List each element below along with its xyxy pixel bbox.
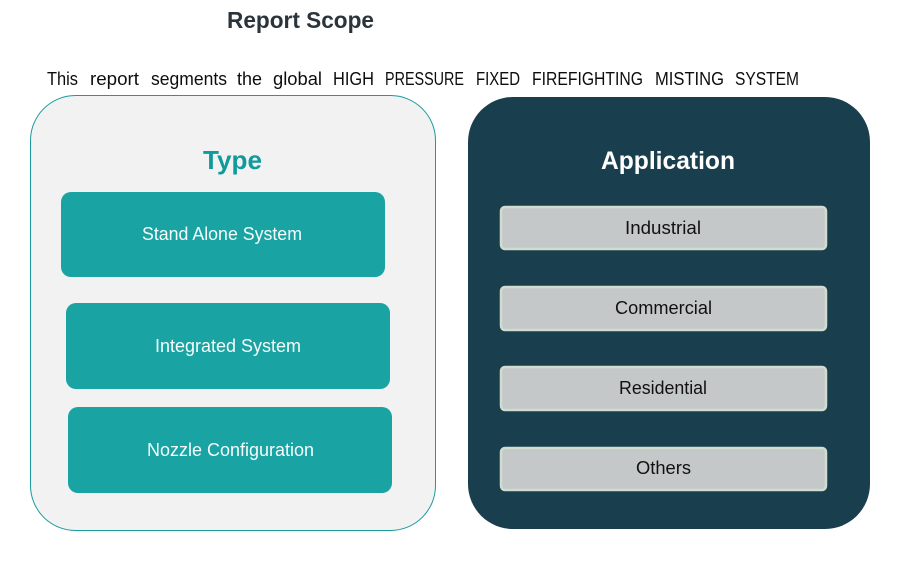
panel: type [30, 96, 436, 530]
panel: application [468, 97, 870, 529]
type heading: Type [203, 145, 262, 175]
type item: stand alone system [61, 192, 385, 277]
type item: integrated system: Integrated System [155, 336, 301, 356]
title: Report Scope [227, 7, 374, 33]
application item: others: Others [636, 458, 691, 478]
intro text: FIREFIGHTING [532, 69, 643, 89]
intro text: report [90, 69, 139, 89]
application item: residential: Residential [619, 378, 707, 398]
intro text: SYSTEM [735, 69, 799, 89]
intro text: the [237, 69, 262, 89]
application item: industrial: Industrial [625, 218, 701, 238]
intro text: global [273, 69, 322, 89]
application heading: Application [601, 147, 735, 175]
type item: stand alone system: Stand Alone System [142, 224, 302, 244]
type item: integrated system [66, 303, 390, 389]
intro text: PRESSURE [385, 69, 464, 89]
intro text: FIXED [476, 69, 520, 89]
application item: residential [501, 367, 826, 410]
type item: nozzle configuration [68, 407, 392, 493]
application item: industrial [501, 207, 826, 249]
application item: commercial [501, 287, 826, 330]
application item: others [501, 448, 826, 490]
intro text [47, 69, 799, 89]
intro text: MISTING [655, 69, 724, 89]
type item: nozzle configuration: Nozzle Configuration [147, 440, 314, 460]
intro text: segments [151, 69, 227, 89]
intro text: HIGH [333, 69, 374, 89]
intro text: This [47, 69, 78, 89]
application item: commercial: Commercial [615, 298, 712, 318]
